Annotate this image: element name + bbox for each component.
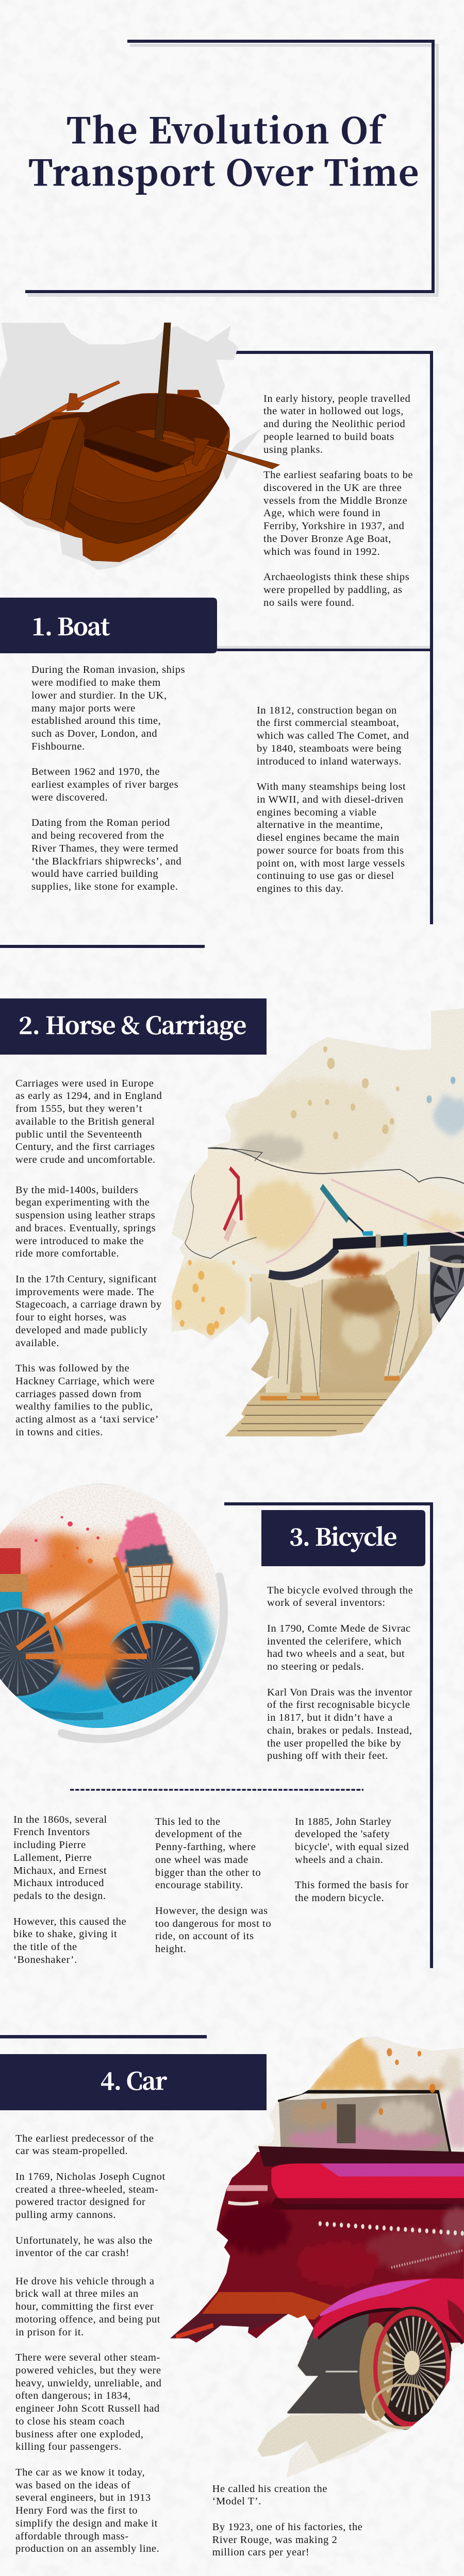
bicycle text: boneshaker column: pedals to the design.: [13, 1890, 106, 1902]
bicycle text: safety bicycle column: wheels and a chain.: [295, 1854, 384, 1866]
boat text: steamboats: power source for boats from this: [257, 845, 404, 856]
boat text: steamboats: [257, 705, 409, 894]
boat text: early history: Age, which were found in: [263, 507, 380, 519]
horse text: improvements: This was followed by the: [15, 1363, 129, 1374]
illustration: boat: [0, 323, 279, 570]
boat text: steamboats: In 1812, construction began on: [257, 705, 397, 716]
bicycle text: boneshaker column: Michaux introduced: [13, 1877, 104, 1889]
boat text: Roman invasion: lower and sturdier. In the UK,: [31, 690, 167, 701]
bicycle text: inventors: in 1817, but it didn’t have a: [267, 1712, 393, 1723]
car text: history: killing four passengers.: [15, 2441, 122, 2452]
bicycle text: boneshaker column: bike to shake, giving it: [13, 1928, 117, 1940]
bicycle text: penny-farthing column: bigger than the other to: [155, 1867, 261, 1878]
bicycle text: penny-farthing column: height.: [155, 1943, 186, 1955]
band: 4. Car: [0, 2054, 267, 2110]
horse text: improvements: four to eight horses, was: [15, 1312, 126, 1323]
boat text: early history: Archaeologists think these ships: [263, 571, 409, 583]
boat text: steamboats: which was called The Comet, and: [257, 730, 409, 741]
car text: Model T: River Rouge, was making 2: [212, 2534, 337, 2546]
title: The Evolution Of: [67, 104, 387, 154]
bicycle text: inventors: The bicycle evolved through the: [267, 1585, 413, 1596]
bicycle text: inventors: invented the celerifere, which: [267, 1636, 402, 1647]
boat text: Roman invasion: Between 1962 and 1970, the: [31, 766, 160, 777]
boat text: Roman invasion: Fishbourne.: [31, 741, 85, 752]
boat text: Roman invasion: were modified to make them: [31, 677, 161, 688]
boat text: steamboats: alternative in the meantime,: [257, 819, 383, 831]
boat text: Roman invasion: earliest examples of river barges: [31, 779, 178, 790]
section frame: boat: [0, 351, 433, 948]
grey brush ring: [0, 1485, 224, 1739]
car text: steam: inventor of the car crash!: [15, 2247, 129, 2259]
car text: history: motoring offence, and being put: [15, 2314, 160, 2325]
hull: [0, 391, 235, 567]
car text: Model T: [212, 2483, 362, 2558]
bicycle text: penny-farthing column: encourage stability.: [155, 1879, 243, 1891]
bicycle text: inventors: of the first recognisable bicycle: [267, 1699, 410, 1710]
left oar: [15, 381, 120, 435]
car text: history: affordable through mass-: [15, 2531, 129, 2542]
boat text: steamboats: With many steamships being lost: [257, 781, 406, 792]
horse text: improvements: Hackney Carriage, which were: [15, 1376, 155, 1387]
bicycle text: safety bicycle column: This formed the basis for: [295, 1879, 409, 1891]
band: 4. Car: 4. Car: [101, 2063, 167, 2097]
horse text: early carriages: from 1555, but they weren’t: [15, 1103, 142, 1114]
boat text: early history: using planks.: [263, 444, 323, 455]
boat text: steamboats: the first commercial steamboat,: [257, 717, 399, 728]
car text: history: in prison for it.: [15, 2327, 84, 2338]
boat text: early history: Ferriby, Yorkshire in 1937, and: [263, 520, 404, 532]
car text: history: powered vehicles, but they were: [15, 2365, 161, 2376]
car text: history: brick wall at three miles an: [15, 2288, 139, 2299]
bicycle text: boneshaker column: including Pierre: [13, 1839, 86, 1851]
boat text: Roman invasion: [31, 664, 185, 892]
boat text: steamboats: engines becoming a viable: [257, 807, 377, 818]
car text: history: was based on the ideas of: [15, 2480, 130, 2491]
bicycle text: penny-farthing column: too dangerous for most to: [155, 1918, 271, 1929]
boat text: early history: no sails were found.: [263, 597, 355, 608]
horse text: early carriages: Carriages were used in Europe: [15, 1078, 154, 1089]
car text: steam: Unfortunately, he was also the: [15, 2235, 153, 2246]
boat shadow: [0, 323, 262, 570]
boat text: steamboats: point on, with most large vessels: [257, 858, 405, 869]
car text: history: The car as we know it today,: [15, 2467, 145, 2478]
illustration: car: [170, 2025, 464, 2487]
bicycle text: inventors: work of several inventors:: [267, 1597, 386, 1608]
boat text: early history: The earliest seafaring boats to be: [263, 469, 413, 481]
band: 3. Bicycle: 3. Bicycle: [289, 1519, 397, 1553]
dashed divider: [70, 1789, 363, 1791]
illustration: horse and carriage: [165, 1003, 464, 1444]
car text: history: to close his steam coach: [15, 2416, 125, 2427]
boat text: steamboats: introduced to inland waterways.: [257, 756, 402, 767]
car text: steam: The earliest predecessor of the: [15, 2133, 154, 2144]
horse text: improvements: In the 17th Century, significant: [15, 1274, 157, 1285]
bicycle text: penny-farthing column: one wheel was made: [155, 1854, 248, 1866]
boat text: steamboats: continuing to use gas or diesel: [257, 870, 394, 882]
car text: history: hour, committing the first ever: [15, 2301, 154, 2312]
bicycle text: penny-farthing column: [155, 1816, 271, 1955]
boat text: Roman invasion: such as Dover, London, and: [31, 728, 157, 739]
horse text: improvements: [15, 1184, 162, 1438]
car text: steam: [15, 2133, 165, 2259]
bicycle text: penny-farthing column: However, the design was: [155, 1905, 268, 1917]
horse text: improvements: carriages passed down from: [15, 1388, 141, 1400]
car text: steam: In 1769, Nicholas Joseph Cugnot: [15, 2171, 165, 2182]
band: 1. Boat: 1. Boat: [31, 608, 110, 642]
horse text: improvements: were introduced to make the: [15, 1235, 144, 1247]
horse text: improvements: available.: [15, 1337, 59, 1349]
horse text: early carriages: were crude and uncomfortable.: [15, 1154, 156, 1165]
car text: history: production on an assembly line.: [15, 2543, 159, 2554]
car text: Model T: million cars per year!: [212, 2547, 309, 2558]
title frame: [25, 41, 437, 295]
horse text: early carriages: available to the British general: [15, 1116, 155, 1127]
boat text: Roman invasion: established around this time,: [31, 715, 161, 726]
band: 2. Horse & Carriage: [0, 998, 267, 1055]
band: 3. Bicycle: [261, 1510, 425, 1566]
bicycle text: safety bicycle column: the modern bicycle.: [295, 1892, 384, 1904]
car text: steam: created a three-wheeled, steam-: [15, 2184, 158, 2195]
horse text: improvements: By the mid-1400s, builders: [15, 1184, 138, 1196]
bicycle text: boneshaker column: ‘Boneshaker’.: [13, 1954, 77, 1965]
boat text: Roman invasion: would have carried building: [31, 868, 158, 879]
bicycle text: inventors: In 1790, Comte Mede de Sivrac: [267, 1623, 411, 1634]
car text: history: heavy, unwieldy, unreliable, and: [15, 2378, 161, 2389]
car text: history: engineer John Scott Russell had: [15, 2403, 160, 2414]
car text: Model T: By 1923, one of his factories, the: [212, 2521, 362, 2533]
bicycle text: safety bicycle column: bicycle', with equal sized: [295, 1841, 409, 1853]
car text: history: simplify the design and make it: [15, 2518, 158, 2529]
boat text: steamboats: engines to this day.: [257, 883, 344, 894]
car text: history: several engineers, but in 1913: [15, 2492, 151, 2503]
horse text: improvements: and braces. Eventually, springs: [15, 1223, 156, 1234]
boat text: early history: In early history, people travelled: [263, 393, 410, 404]
horse text: early carriages: Century, and the first carriages: [15, 1141, 155, 1153]
bicycle text: penny-farthing column: This led to the: [155, 1816, 221, 1827]
bicycle text: penny-farthing column: development of the: [155, 1828, 242, 1840]
boat text: Roman invasion: During the Roman invasion, ships: [31, 664, 185, 675]
bicycle text: boneshaker column: However, this caused the: [13, 1916, 126, 1927]
car text: steam: powered tractor designed for: [15, 2196, 145, 2208]
bicycle text: safety bicycle column: [295, 1816, 409, 1904]
horse text: early carriages: [15, 1078, 162, 1165]
bicycle text: inventors: had two wheels and a seat, but: [267, 1648, 405, 1659]
section frame: bicycle: [224, 1502, 433, 1968]
horse text: improvements: ride more comfortable.: [15, 1248, 119, 1259]
car text: Model T: He called his creation the: [212, 2483, 327, 2495]
illustration: bicycle: [0, 1484, 227, 1752]
band: 2. Horse & Carriage: 2. Horse & Carriage: [19, 1007, 246, 1041]
bicycle text: penny-farthing column: ride, on account of its: [155, 1930, 254, 1942]
boat text: Roman invasion: many major ports were: [31, 703, 136, 714]
boat text: Roman invasion: Dating from the Roman period: [31, 817, 170, 828]
bicycle text: boneshaker column: [13, 1814, 126, 1965]
boat text: Roman invasion: ‘the Blackfriars shipwrecks’, and: [31, 856, 181, 867]
boat text: Roman invasion: supplies, like stone for example.: [31, 881, 178, 892]
bicycle text: inventors: pushing off with their feet.: [267, 1750, 388, 1761]
bicycle text: inventors: Karl Von Drais was the inventor: [267, 1687, 412, 1698]
horse text: improvements: developed and made publicly: [15, 1325, 147, 1336]
horse text: improvements: in towns and cities.: [15, 1427, 103, 1438]
boat text: steamboats: by 1840, steamboats were being: [257, 743, 402, 754]
car text: Model T: ‘Model T’.: [212, 2496, 261, 2507]
mast: [155, 323, 171, 440]
horse text: improvements: suspension using leather straps: [15, 1210, 155, 1221]
band: 1. Boat: [0, 598, 217, 653]
boat text: early history: the water in hollowed out logs,: [263, 405, 404, 417]
boat text: steamboats: in WWII, and with diesel-driven: [257, 794, 404, 805]
boat text: early history: [263, 393, 413, 608]
bicycle text: boneshaker column: In the 1860s, several: [13, 1814, 107, 1825]
bicycle text: inventors: chain, brakes or pedals. Instead,: [267, 1725, 412, 1736]
car text: history: Henry Ford was the first to: [15, 2505, 138, 2516]
boat text: early history: and during the Neolithic period: [263, 418, 405, 430]
horse text: improvements: Stagecoach, a carriage drawn by: [15, 1299, 162, 1310]
bicycle text: boneshaker column: French Inventors: [13, 1826, 90, 1838]
car text: history: often dangerous; in 1834,: [15, 2390, 131, 2401]
bicycle text: safety bicycle column: developed the 'safety: [295, 1828, 390, 1840]
boat text: early history: discovered in the UK are three: [263, 482, 402, 494]
bicycle text: inventors: [267, 1585, 413, 1761]
boat text: steamboats: diesel engines became the main: [257, 832, 400, 843]
horse text: improvements: acting almost as a ‘taxi service’: [15, 1414, 159, 1425]
car text: steam: pulling army cannons.: [15, 2209, 116, 2221]
bicycle text: safety bicycle column: In 1885, John Starley: [295, 1816, 392, 1827]
boat text: Roman invasion: River Thames, they were termed: [31, 843, 178, 854]
title: Transport Over Time: [28, 146, 419, 196]
boat text: Roman invasion: were discovered.: [31, 792, 108, 803]
bicycle text: penny-farthing column: Penny-farthing, where: [155, 1841, 256, 1853]
bicycle text: inventors: no steering or pedals.: [267, 1661, 364, 1672]
boat text: early history: were propelled by paddling, as: [263, 584, 403, 596]
boat text: early history: which was found in 1992.: [263, 546, 380, 557]
bicycle text: inventors: the user propelled the bike by: [267, 1738, 401, 1749]
boat text: Roman invasion: and being recovered from the: [31, 830, 164, 841]
bicycle text: boneshaker column: the title of the: [13, 1941, 77, 1953]
car text: history: business after one exploded,: [15, 2429, 144, 2440]
boat text: early history: the Dover Bronze Age Boat,: [263, 533, 391, 545]
boat text: early history: vessels from the Middle Bronze: [263, 495, 407, 506]
bicycle text: boneshaker column: Michaux, and Ernest: [13, 1865, 107, 1876]
car text: history: There were several other steam-: [15, 2352, 160, 2363]
boat text: early history: people learned to build boats: [263, 431, 394, 443]
bicycle text: boneshaker column: Lallement, Pierre: [13, 1852, 92, 1863]
title: [28, 104, 419, 196]
right oar: [163, 433, 279, 469]
horse text: early carriages: public until the Seventeenth: [15, 1129, 142, 1140]
horse text: improvements: wealthy families to the public,: [15, 1401, 153, 1412]
car text: steam: car was steam-propelled.: [15, 2145, 128, 2157]
horse text: early carriages: as early as 1294, and in England: [15, 1090, 162, 1101]
rule above car: [0, 2035, 207, 2038]
horse text: improvements: improvements were made. The: [15, 1286, 154, 1298]
car text: history: He drove his vehicle through a: [15, 2276, 155, 2287]
horse text: improvements: began experimenting with the: [15, 1197, 150, 1208]
car text: history: [15, 2276, 161, 2554]
